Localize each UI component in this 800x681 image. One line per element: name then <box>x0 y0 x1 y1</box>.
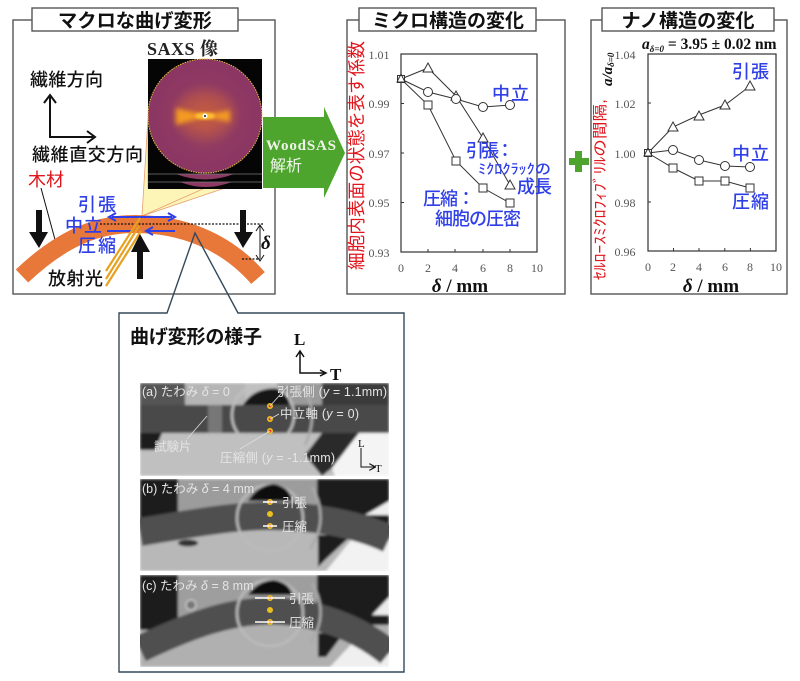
photo (a): T <box>375 463 382 475</box>
y axis label: a/a <box>600 67 616 86</box>
line chart: micro <box>368 48 552 297</box>
line chart: micro: 1.01 <box>368 48 390 62</box>
photo (a) <box>140 383 389 476</box>
dotted reference lines <box>100 224 263 259</box>
label: perpendicular direction: 繊維直交方向 <box>32 145 143 165</box>
lattice spacing value: δ=0 <box>650 44 664 54</box>
heading: nano <box>602 8 774 32</box>
label: neutral: 中立 <box>732 144 769 164</box>
arrow: WoodSAS analysis: WoodSAS <box>266 138 336 154</box>
label: wood: 木材 <box>28 170 64 190</box>
heading: micro: ミクロ構造の変化 <box>372 10 524 32</box>
line chart: nano: 2 <box>670 260 676 274</box>
photo (a): 引張側 (y = 1.1mm) <box>277 385 387 399</box>
photo (b): 圧縮 <box>282 519 307 534</box>
heading: macro bending: マクロな曲げ変形 <box>58 10 212 32</box>
heading: nano: ナノ構造の変化 <box>622 10 754 32</box>
photo (a): 試験片 <box>154 439 192 454</box>
line chart: micro: 2 <box>425 261 431 275</box>
panel: macro bending deformation <box>13 8 345 294</box>
y axis label: ｾﾙﾛｰｽﾐｸﾛﾌｨﾌﾞﾘﾙの間隔, <box>592 99 609 280</box>
synchrotron beams <box>106 218 141 286</box>
photo (b): (b) たわみ δ = 4 mm <box>142 482 254 496</box>
label: tension microcrack growth: 引張： <box>466 141 514 161</box>
label: tension microcrack growth: ﾐｸﾛｸﾗｯｸの <box>478 161 551 177</box>
line chart: nano: 0.96 <box>614 245 636 259</box>
photo (c): 圧縮 <box>289 615 314 630</box>
line chart: nano: 6 <box>722 260 728 274</box>
label: neutral: 中立 <box>65 216 102 236</box>
photo (a): 中立軸 (y = 0) <box>280 406 359 421</box>
line chart: micro: δ / mm <box>432 276 488 297</box>
arrow: WoodSAS analysis <box>263 107 345 198</box>
icon: plus <box>569 151 589 172</box>
y axis label: 細胞内表面の状態を表す係数 <box>347 41 367 270</box>
label: tension: 引張 <box>78 195 116 215</box>
loading arrows <box>29 210 253 279</box>
line chart: micro: 4 <box>452 261 458 275</box>
label: tension microcrack growth <box>466 141 552 197</box>
line chart: nano: 10 <box>770 260 782 274</box>
photo (b): 引張 <box>282 496 308 510</box>
photo (c) <box>140 575 389 667</box>
photo (a): (a) たわみ δ = 0 <box>142 385 230 399</box>
label: tension: 引張 <box>732 62 769 82</box>
line chart: nano: 8 <box>747 260 753 274</box>
axes: L T <box>294 330 342 384</box>
arrow: WoodSAS analysis: 解析 <box>270 157 302 175</box>
line chart: micro: 0.95 <box>368 196 390 210</box>
line chart: micro: 6 <box>480 261 486 275</box>
label: fiber direction: 繊維方向 <box>30 70 103 90</box>
label: synchrotron light: 放射光 <box>48 269 103 289</box>
line chart: micro: 0.99 <box>368 97 390 111</box>
y axis label: δ=0 <box>606 52 616 67</box>
label: compression cell densification: 細胞の圧密 <box>435 209 521 229</box>
line chart: nano: 1.04 <box>614 48 636 62</box>
axes: L T: T <box>330 365 342 384</box>
line chart: micro: 8 <box>507 261 513 275</box>
line chart: micro: 0.97 <box>368 147 390 161</box>
photo (c): (c) たわみ δ = 8 mm <box>142 579 253 593</box>
label: neutral: 中立 <box>492 84 529 104</box>
line chart: nano <box>614 48 782 297</box>
X-ray fan to SAXS image <box>142 118 225 216</box>
label: compression: 圧縮 <box>732 192 769 212</box>
line chart: micro: 0 <box>398 261 404 275</box>
arrows: fiber axes <box>44 95 95 143</box>
label: SAXS image: SAXS 像 <box>147 39 218 59</box>
heading: bending appearance: 曲げ変形の様子 <box>130 326 262 348</box>
lattice spacing value: = 3.95 ± 0.02 nm <box>664 36 777 53</box>
label: tension microcrack growth: 成長 <box>517 177 552 197</box>
panel: micro structure change <box>347 8 565 297</box>
photo (a): 圧縮側 (y = -1.1mm) <box>220 450 335 465</box>
line chart: nano: δ / mm <box>683 276 739 297</box>
line chart: micro: 10 <box>531 261 543 275</box>
line chart: micro: 0.93 <box>368 246 390 260</box>
photo (a): L <box>358 438 365 450</box>
line chart: nano: 4 <box>696 260 702 274</box>
y axis label <box>592 52 616 280</box>
deflection delta <box>256 225 271 261</box>
SAXS detector image <box>148 59 262 189</box>
blue arrows: strain directions <box>107 213 175 235</box>
line chart: nano: 1.00 <box>614 147 636 161</box>
heading: macro bending <box>32 8 238 32</box>
line chart: nano: 0.98 <box>614 196 636 210</box>
label: compression cell densification: 圧縮： <box>423 189 475 209</box>
panel: nano structure change <box>591 8 787 297</box>
photo (c): 引張 <box>289 592 315 606</box>
callout panel: bending views <box>119 233 404 672</box>
lattice spacing value: a <box>642 36 650 53</box>
photo (b) <box>140 479 389 571</box>
line chart: nano: 0 <box>645 260 651 274</box>
bent wood specimen <box>22 224 258 278</box>
label: compression cell densification <box>423 189 521 229</box>
label: compression: 圧縮 <box>78 236 116 256</box>
deflection delta: δ <box>261 233 271 254</box>
line chart: nano: 1.02 <box>614 97 636 111</box>
axes: L T: L <box>294 330 305 349</box>
leader: wood <box>41 188 57 247</box>
